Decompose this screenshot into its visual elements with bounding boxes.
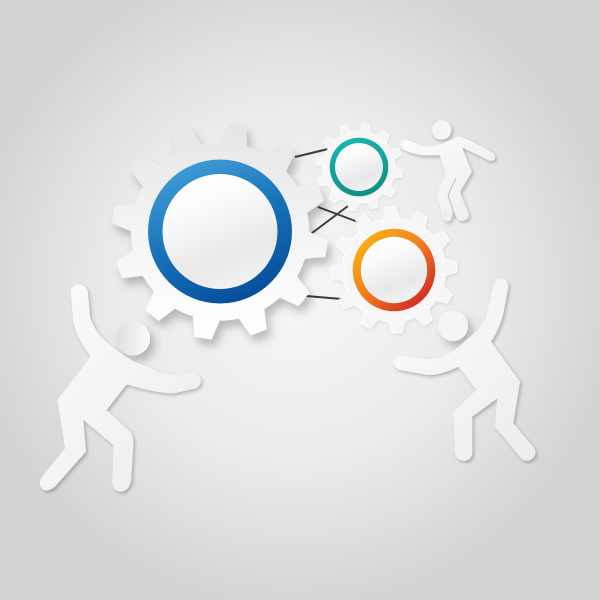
right figure body [393, 279, 536, 461]
figure: top right [400, 120, 495, 222]
figure: bottom right [393, 279, 536, 461]
figure: bottom left [40, 284, 201, 492]
gear body: orange [328, 204, 460, 336]
top figure leg split [448, 178, 456, 219]
small teal gear [309, 117, 409, 217]
blue gear centre disc [162, 174, 278, 289]
teal ring [330, 138, 388, 196]
left figure body [40, 284, 201, 492]
orange ring [353, 229, 435, 311]
top figure head [432, 120, 451, 140]
right figure head [438, 311, 468, 341]
top figure body [400, 136, 495, 222]
large blue gear [112, 128, 336, 350]
medium orange gear [328, 204, 460, 336]
blue ring [148, 160, 292, 304]
teal gear centre disc [335, 143, 383, 191]
left figure head [116, 322, 150, 356]
orange gear centre disc [361, 237, 427, 303]
infographic: people turning connected gears [38, 28, 552, 542]
connector lines between gears [295, 149, 358, 299]
gear body: large [112, 128, 336, 350]
gear body: teal [309, 117, 409, 217]
